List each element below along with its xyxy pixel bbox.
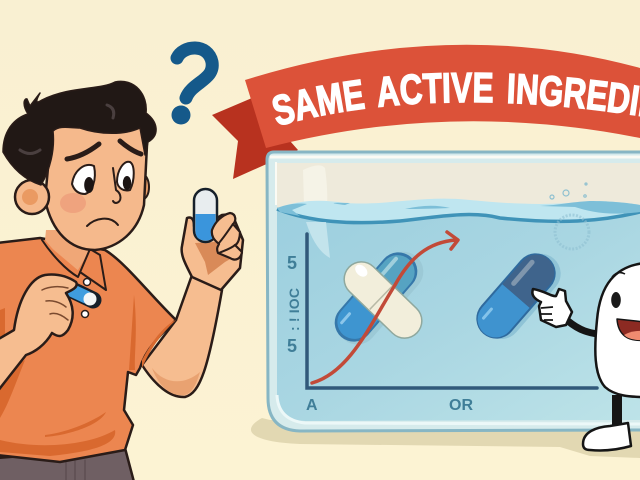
upper glass	[277, 163, 640, 212]
chart tick labels	[286, 253, 473, 414]
mascot body	[595, 263, 640, 397]
trouser pleats	[66, 460, 85, 480]
hair highlights	[20, 105, 114, 154]
shirt shading	[0, 295, 176, 456]
mascot capsule character	[532, 263, 640, 450]
man's raised hand with capsule	[182, 189, 243, 290]
chart tick labels: 5	[287, 253, 297, 273]
collar	[42, 240, 106, 290]
man's trousers	[0, 448, 134, 480]
capsule: blue and navy	[468, 243, 569, 349]
ripple ring	[555, 215, 589, 249]
man's face	[45, 125, 148, 250]
water tank	[267, 152, 640, 431]
chart tick labels: 5	[287, 336, 297, 356]
chart tick labels: OR	[449, 397, 473, 414]
chart axes	[307, 234, 597, 388]
man's nose and mouth	[87, 168, 120, 226]
small capsule	[70, 278, 96, 318]
glass	[267, 152, 640, 431]
mascot arm	[568, 321, 598, 334]
palm	[182, 214, 243, 290]
mascot mouth	[617, 319, 640, 340]
cheek blush	[60, 193, 86, 213]
water streak	[306, 222, 330, 258]
man's left ear	[15, 180, 49, 214]
man's eyes	[72, 162, 134, 194]
mascot shoe	[583, 423, 631, 450]
water	[277, 205, 640, 421]
man's raised arm	[142, 275, 222, 397]
chart tick labels: A	[306, 397, 318, 414]
man's right ear	[137, 175, 149, 199]
palm shadow	[195, 242, 232, 275]
man's shirt	[0, 238, 176, 462]
blue capsule	[327, 242, 432, 353]
chart tick labels: : ! IOC	[286, 288, 302, 331]
man's hair	[3, 81, 156, 185]
capsule: crossed blue and white	[327, 242, 432, 353]
neck	[45, 230, 105, 275]
tank shadow	[251, 418, 640, 458]
rising trend arrow	[312, 232, 458, 383]
mascot brow	[612, 273, 625, 277]
banner ribbon	[212, 44, 640, 179]
glass reflection	[303, 165, 327, 205]
fingers	[212, 213, 242, 260]
forearm shading	[152, 368, 200, 395]
held capsule	[194, 189, 217, 242]
mascot leg	[612, 395, 622, 428]
mascot hand	[532, 289, 572, 327]
bubbles	[550, 183, 587, 199]
mascot eye	[611, 292, 621, 308]
man's lower hand with capsule	[0, 275, 96, 392]
ribbon band	[245, 45, 640, 148]
ribbon tail	[212, 98, 298, 179]
man	[0, 81, 243, 480]
water surface	[277, 199, 640, 222]
white capsule	[336, 254, 430, 346]
eyebrows	[67, 141, 141, 159]
icon: question mark	[172, 48, 212, 124]
